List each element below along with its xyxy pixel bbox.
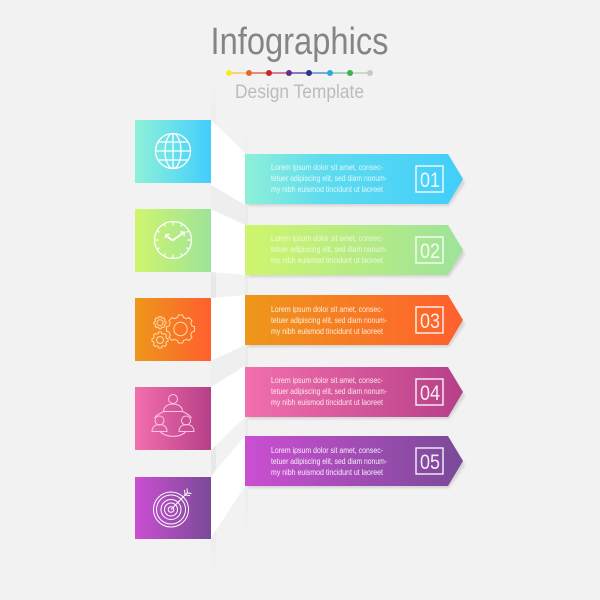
white connector bands bbox=[211, 120, 245, 538]
text block: tetuer adipiscing elit, sed diam nonum- bbox=[271, 244, 387, 254]
panel: step 3 arrow banner bbox=[245, 295, 465, 347]
text block: my nibh euismod tincidunt ut laoreet bbox=[271, 326, 384, 336]
number box: 01 bbox=[420, 169, 440, 192]
text block: tetuer adipiscing elit, sed diam nonum- bbox=[271, 315, 387, 325]
number box: 03 bbox=[420, 310, 440, 333]
panel: step 2 arrow banner bbox=[245, 225, 465, 277]
number box: 04 bbox=[420, 382, 440, 405]
text block: Lorem ipsum dolor sit amet, consec- bbox=[271, 304, 383, 314]
panel: step 4 icon tile bbox=[135, 387, 211, 450]
text block: my nibh euismod tincidunt ut laoreet bbox=[271, 397, 384, 407]
text block: my nibh euismod tincidunt ut laoreet bbox=[271, 184, 384, 194]
icon: gears bbox=[152, 315, 194, 348]
panel: step 1 arrow banner bbox=[245, 154, 465, 206]
colored dot timeline bbox=[226, 70, 373, 76]
panel: step 5 arrow banner bbox=[245, 436, 465, 488]
text block: tetuer adipiscing elit, sed diam nonum- bbox=[271, 173, 387, 183]
text block: Lorem ipsum dolor sit amet, consec- bbox=[271, 233, 383, 243]
icon: globe bbox=[156, 134, 190, 168]
number box: 02 bbox=[420, 240, 440, 263]
text block: tetuer adipiscing elit, sed diam nonum- bbox=[271, 386, 387, 396]
subtitle: Design Template bbox=[235, 82, 364, 103]
text block: tetuer adipiscing elit, sed diam nonum- bbox=[271, 456, 387, 466]
vertical fold shadows bbox=[211, 85, 248, 575]
text block: Lorem ipsum dolor sit amet, consec- bbox=[271, 375, 383, 385]
panel: step 1 icon tile bbox=[135, 120, 211, 183]
icon: clock bbox=[154, 222, 192, 258]
panel: step 3 icon tile bbox=[135, 298, 211, 361]
text block: Lorem ipsum dolor sit amet, consec- bbox=[271, 445, 383, 455]
title: Infographics bbox=[210, 21, 388, 63]
icon: target with arrow bbox=[154, 488, 192, 527]
text block: my nibh euismod tincidunt ut laoreet bbox=[271, 467, 384, 477]
text block: my nibh euismod tincidunt ut laoreet bbox=[271, 255, 384, 265]
number box: 05 bbox=[420, 451, 440, 474]
icon: team circle bbox=[152, 394, 194, 436]
text block: Lorem ipsum dolor sit amet, consec- bbox=[271, 162, 383, 172]
panel: step 5 icon tile bbox=[135, 477, 211, 539]
panel: step 4 arrow banner bbox=[245, 367, 465, 419]
panel: step 2 icon tile bbox=[135, 209, 211, 272]
